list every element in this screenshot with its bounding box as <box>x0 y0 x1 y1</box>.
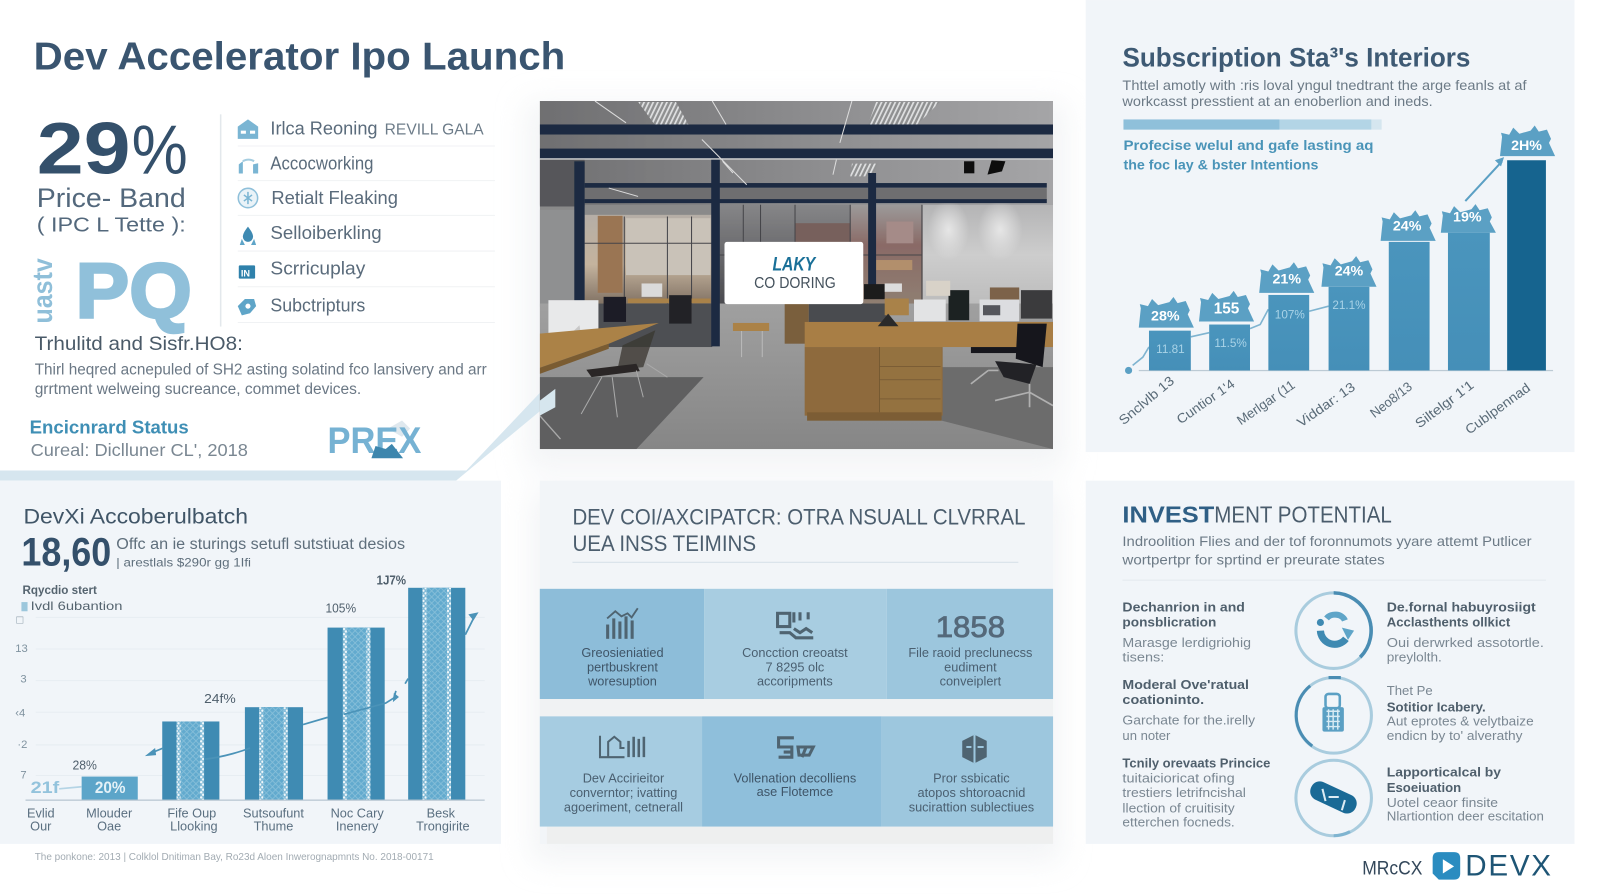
icon: glyph mark <box>779 738 813 757</box>
heading: UEA INSS TEIMINS <box>572 531 756 556</box>
left column: coationinto. <box>1122 692 1204 707</box>
legend <box>21 584 122 613</box>
cell 5: ase Flotemce <box>757 784 833 799</box>
brand logo <box>1362 850 1551 883</box>
right column: Lapporticalcal by <box>1387 765 1502 780</box>
axis labels: Cublpennad <box>1462 380 1533 437</box>
y axis labels: 3 <box>20 674 27 686</box>
status block: Cureal: Diclluner CL', 2018 <box>31 440 248 460</box>
heading <box>1122 501 1392 527</box>
photo sign <box>724 242 863 304</box>
bar 4 <box>328 628 385 800</box>
description: | arestlals $290r gg 1Ifi <box>116 555 251 569</box>
intro: wortpertpr for sprtind er preurate states <box>1121 552 1385 568</box>
item 5: Scrricuplay <box>270 258 366 279</box>
intro text block: Trhulitd and Sisfr.HO8: <box>35 333 243 355</box>
highlighted note <box>1123 138 1373 173</box>
tag 3 <box>1259 262 1314 293</box>
tag 6 <box>1441 204 1496 233</box>
accent band with diagonal <box>0 393 540 481</box>
stat sub label: ( IPC L Tette ): <box>37 215 186 237</box>
item 4: Selloiberkling <box>270 222 382 243</box>
cell 1: pertbuskrent <box>587 659 658 674</box>
item 1: REVILL GALA <box>385 122 484 139</box>
cell 2: Concction creoatst <box>742 645 848 660</box>
axis labels: Merlgar (11 <box>1234 377 1298 428</box>
tag 2 <box>1199 291 1254 321</box>
right column: De.fornal habuyrosiigt <box>1387 599 1536 614</box>
description: workcasst presstient at an enoberlion and ineds. <box>1121 94 1433 109</box>
right column: Oui derwrked assotortle. <box>1387 635 1544 650</box>
category labels: Evlid <box>27 805 55 820</box>
y axis labels: 13 <box>15 643 28 655</box>
in-bar labels: 20% <box>95 779 126 797</box>
right column: Aut eprotes & velytbaize <box>1387 714 1534 729</box>
y axis labels: 7 <box>20 770 27 782</box>
axis labels: Neo8/13 <box>1367 379 1415 421</box>
tag 4: 24% <box>1335 264 1364 280</box>
left column: un noter <box>1122 728 1171 743</box>
tag 5 <box>1381 210 1436 241</box>
value labels <box>72 573 406 772</box>
photo sign: LAKY <box>772 253 817 275</box>
category labels: Noc Cary <box>331 805 384 820</box>
tag 1: 28% <box>1151 308 1180 324</box>
tag 4 <box>1321 256 1377 287</box>
right column: Esoeiuation <box>1387 780 1461 795</box>
status logo PREX: PREX <box>328 420 422 461</box>
left column: tisens: <box>1122 649 1164 664</box>
intro <box>1121 534 1532 568</box>
axis labels <box>1116 373 1533 437</box>
in-bar values: 11.81 <box>1156 343 1185 356</box>
cell 6 <box>882 716 1053 827</box>
value labels: 1J7% <box>377 573 406 588</box>
cell 6: sucirattion sublectiues <box>909 799 1034 814</box>
axis labels: Snclvlb 13 <box>1116 373 1177 428</box>
panel: price band stat <box>27 107 192 334</box>
panel: investment potential <box>1086 481 1574 844</box>
description: Thttel amotly with :ris loval yngul tnedtrant the arge feanls at af <box>1122 78 1527 93</box>
tag 7 <box>1500 126 1555 156</box>
intro text block: grrtment welweing sucreance, commet devices. <box>35 381 361 398</box>
value labels: 24f% <box>204 691 236 706</box>
bar 5 <box>408 588 465 800</box>
item 3: Retialt Fleaking <box>271 187 398 208</box>
in-bar values: 21.1% <box>1332 299 1366 312</box>
icon: glyph mark <box>778 612 813 638</box>
cell 1: woresuption <box>587 674 657 689</box>
legend: Rqycdio stert <box>22 584 97 597</box>
tag 5: 24% <box>1393 219 1422 235</box>
left column: Garchate for the.irelly <box>1122 713 1256 728</box>
panel: photo of coworking office <box>540 101 1053 449</box>
brand logo: MRcCX <box>1362 858 1423 880</box>
category labels: Trongirite <box>416 819 470 834</box>
item 2: Accocworking <box>270 152 373 173</box>
category labels: Thume <box>254 819 293 834</box>
right column <box>1387 599 1544 823</box>
left column: etterchen focneds. <box>1122 815 1235 830</box>
title: Dev Accelerator Ipo Launch <box>34 35 565 78</box>
in-bar values <box>1156 299 1366 356</box>
legend: Ivdl 6ubantion <box>31 600 122 613</box>
circle icon: cycle <box>1296 593 1371 668</box>
trend arrows <box>59 612 479 789</box>
vertical side word: uastv <box>27 258 58 324</box>
y axis labels <box>15 615 28 782</box>
category labels: Llooking <box>170 819 218 834</box>
item 1 <box>238 118 484 139</box>
left column: trestiers letrifncishal <box>1122 785 1246 800</box>
divider <box>220 114 221 327</box>
left column: Dechanrion in and <box>1122 599 1245 614</box>
y axis labels: □ <box>16 615 23 627</box>
highlighted note: Profecise welul and gafe lasting aq <box>1123 138 1373 154</box>
in-bar labels: 21f <box>31 779 60 797</box>
category labels: Mlouder <box>86 805 133 820</box>
heading <box>572 505 1026 556</box>
item 1: Irlca Reoning <box>270 118 378 139</box>
axis labels: Cuntior 1'4 <box>1174 376 1238 427</box>
icon: building <box>600 736 644 758</box>
soft shadow behind photo and centre panel <box>526 102 1066 862</box>
category labels: Our <box>30 819 52 834</box>
left column: Marasge lerdigriohig <box>1122 635 1251 650</box>
cell 3 <box>887 589 1053 699</box>
cell 5 <box>702 716 882 827</box>
value labels: 105% <box>326 600 356 615</box>
icon: bars <box>606 608 638 639</box>
cell 3: eudiment <box>944 659 997 674</box>
big number: 18,60 <box>21 530 111 574</box>
tag 6: 19% <box>1453 209 1482 225</box>
description: Offc an ie sturings setufl sutstiuat desios <box>116 536 405 553</box>
circle icon: bandage <box>1296 760 1371 836</box>
cell 3: File raoid preclunecss <box>908 645 1032 660</box>
heading: DevXi Accoberulbatch <box>23 505 248 529</box>
panel: accelerator bar chart <box>0 481 501 844</box>
item 4 <box>240 222 382 245</box>
cell 1 <box>540 589 704 699</box>
cell 4: agoeriment, cetnerall <box>564 799 683 814</box>
bar chart <box>1116 126 1555 437</box>
description <box>116 536 405 569</box>
heading: INVEST <box>1122 501 1215 527</box>
item 6: Subctripturs <box>270 294 365 315</box>
big stat 29%: 29 <box>37 107 131 190</box>
heading: DEV COI/AXCIPATCR: OTRA NSUALL CLVRRAL <box>572 505 1026 530</box>
in-bar labels <box>31 779 126 797</box>
panel: subscription chart <box>1086 0 1574 452</box>
cell 3: conveiplert <box>940 674 1002 689</box>
intro: Indroolition Flies and der tof foronnumots yyare attemt Putlicer <box>1122 534 1532 550</box>
tag 7: 2H% <box>1511 138 1542 154</box>
left column: tuitaicioricat ofing <box>1122 771 1235 786</box>
description <box>1121 78 1527 109</box>
value labels: 28% <box>72 757 97 772</box>
right column: Acclasthents ollkict <box>1387 615 1511 630</box>
icon: number mark: 1858 <box>936 611 1005 644</box>
percent sign: % <box>132 111 188 189</box>
left column: ponsblicration <box>1122 615 1216 630</box>
category labels: Inenery <box>336 819 379 834</box>
category labels <box>27 805 470 834</box>
item 5: IN <box>241 269 250 279</box>
cell 4: converntor; ivatting <box>570 785 677 800</box>
tag 2: 155 <box>1214 300 1240 317</box>
panel: accelerator terms grid <box>540 481 1053 844</box>
cell 4 <box>540 716 702 827</box>
icon: play badge <box>1433 852 1460 880</box>
left column: Moderal Ove'ratual <box>1122 677 1249 692</box>
left column <box>1122 599 1270 830</box>
circle icon: keypad <box>1296 678 1371 753</box>
left column: Tcnily orevaats Princice <box>1122 755 1270 770</box>
right column: Uotel ceaor finsite <box>1387 795 1498 810</box>
axis labels: Viddar: 13 <box>1294 379 1358 430</box>
category labels: Besk <box>427 805 456 820</box>
y axis labels: ·2 <box>17 739 27 751</box>
photo sign: CO DORING <box>754 275 836 292</box>
in-bar values: 11.5% <box>1214 337 1247 350</box>
feature list <box>238 118 495 322</box>
right column: Thet Pe <box>1387 683 1433 698</box>
footer note: The ponkone: 2013 | Colklol Dnitiman Bay, Ro23d Aloen Inwerognapmnts No. 2018-00171 <box>35 852 434 863</box>
category labels: Oae <box>97 819 121 834</box>
cell 2 <box>704 589 887 699</box>
cell 2: 7 8295 olc <box>765 659 825 674</box>
right column: preylolth. <box>1387 649 1442 664</box>
left column: llection of cruitisity <box>1122 800 1235 815</box>
tag 1 <box>1139 297 1194 328</box>
highlighted note: the foc lay & bster Intentions <box>1123 157 1318 173</box>
cell 1: Greosieniatied <box>581 645 664 660</box>
y axis labels: ‹4 <box>15 707 25 719</box>
intro text block <box>35 333 487 398</box>
cell 6: Pror ssbicatic <box>933 771 1010 786</box>
icon: hexagon <box>962 735 987 763</box>
brand logo: DEVX <box>1465 850 1551 883</box>
category labels: Sutsoufunt <box>243 805 304 820</box>
right column: Nlartiontion deer escitation <box>1387 808 1544 823</box>
bars <box>82 588 465 800</box>
cell 6: atopos shtoroacnid <box>918 785 1025 800</box>
status block: Encicnrard Status <box>30 417 189 438</box>
tag 3: 21% <box>1272 272 1301 288</box>
cell 2: accoripments <box>757 674 833 689</box>
intro text block: Thirl heqred acnepuled of SH2 asting solatind fco lansivery and arr <box>35 362 487 379</box>
heading: Subscription Sta³'s Interiors <box>1122 42 1470 72</box>
cell 4: Dev Accirieitor <box>583 771 665 786</box>
bar 2 <box>162 721 219 800</box>
status block <box>30 417 248 460</box>
right column: endicn by to' alverathy <box>1387 728 1523 743</box>
progress bar <box>1123 119 1382 130</box>
right column: Sotitior Icabery. <box>1387 699 1486 714</box>
in-bar values: 107% <box>1275 308 1305 321</box>
big PQ letters: PQ <box>76 248 192 334</box>
category labels: Fife Oup <box>167 805 216 820</box>
heading: MENT POTENTIAL <box>1214 501 1392 527</box>
cell 5: Vollenation decolliens <box>734 771 856 786</box>
stat label: Price- Band <box>37 183 186 213</box>
axis labels: Siltelgr 1'1 <box>1412 377 1477 431</box>
bar 3 <box>245 707 303 800</box>
